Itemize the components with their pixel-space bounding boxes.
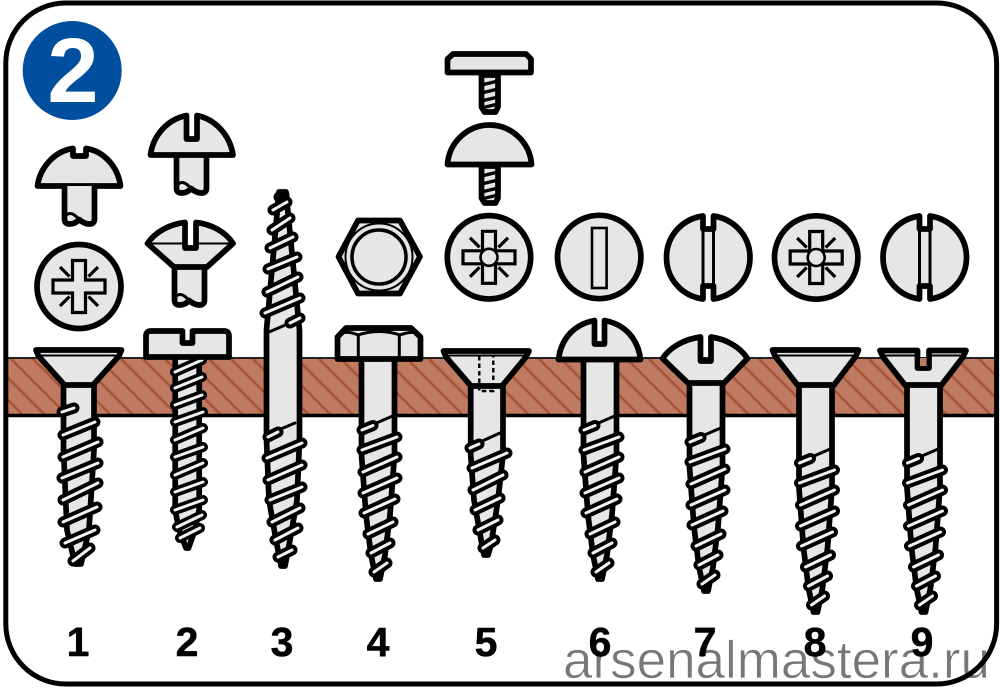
screw 5 dome button head	[448, 125, 532, 203]
screw 5 flat button head	[448, 54, 531, 112]
number labels: 4	[367, 619, 390, 665]
screw 2 threaded body	[175, 355, 203, 548]
screw 9	[880, 216, 966, 612]
screw 8 threaded body	[799, 384, 834, 612]
screw 4 hex head side	[338, 328, 420, 359]
number labels: 5	[475, 619, 497, 665]
screw 5 countersunk head with dashed recess	[444, 351, 529, 391]
screw 6 slotted top view	[558, 215, 641, 299]
screw 6 threaded body	[584, 351, 619, 579]
screw 2	[146, 116, 233, 548]
screw 9 threaded body	[907, 384, 942, 612]
screw 3 lower thread	[267, 423, 302, 557]
screw 2 stem A	[176, 155, 206, 193]
number labels: 3	[271, 619, 293, 665]
screw 4	[338, 220, 420, 579]
number labels: 7	[694, 619, 716, 665]
screw 1 countersunk head	[36, 350, 122, 385]
screw 2 stem B	[174, 267, 204, 305]
screw 7 raised countersunk head	[662, 337, 748, 383]
wood plank	[6, 358, 996, 416]
screw 9 slotted top view	[883, 216, 966, 299]
number labels: 9	[911, 619, 933, 665]
screw 1 threaded body	[62, 380, 98, 564]
screw 4 hex top view	[338, 220, 420, 294]
screw 5	[444, 54, 532, 555]
badge: number 2	[23, 20, 122, 122]
badge: number 2: 2	[47, 20, 99, 122]
screw 7 threaded body	[690, 363, 725, 591]
number labels: 1	[67, 619, 89, 665]
screw 3	[265, 192, 302, 566]
screw 7	[662, 216, 750, 591]
number labels: 6	[589, 619, 611, 665]
number labels: 2	[176, 619, 198, 665]
screw 2 dome slotted head	[150, 116, 233, 155]
screw 4 threaded body	[362, 351, 397, 579]
screw 1 pozidriv top view	[37, 244, 121, 328]
screw 1 dome slotted head	[38, 148, 120, 186]
watermark: arsenalmastera.ru	[563, 631, 990, 689]
number labels: 8	[804, 619, 826, 665]
screw 8 countersunk head	[772, 350, 858, 385]
screw 9 slotted countersunk head	[880, 350, 966, 385]
screw 3 upper thread	[265, 195, 300, 332]
screw 8 pozidriv top view	[774, 216, 858, 299]
screw 5 pozidriv top view	[447, 216, 531, 299]
screw 8	[772, 216, 858, 612]
screw 1	[36, 148, 122, 564]
screw 7 slotted top view	[666, 216, 750, 299]
screw 2 pan head	[146, 331, 229, 357]
screw 1 stem	[64, 186, 94, 224]
screw 3 body	[266, 192, 300, 566]
screw 2 raised countersunk head	[148, 222, 233, 267]
screw 6	[558, 215, 641, 579]
screw 5 threaded body	[470, 385, 507, 555]
screw 6 dome head	[558, 320, 640, 360]
number labels	[67, 619, 933, 665]
